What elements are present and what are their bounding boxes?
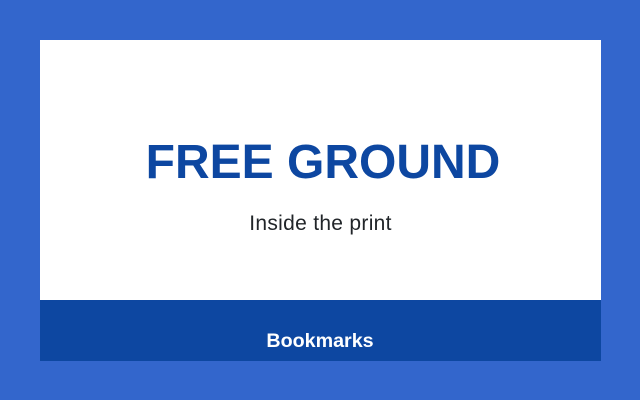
- footer band: [40, 300, 601, 361]
- footer label: Bookmarks: [266, 330, 374, 352]
- title: FREE GROUND: [146, 136, 500, 189]
- subtitle: Inside the print: [249, 212, 392, 235]
- panel: white card: [40, 40, 601, 361]
